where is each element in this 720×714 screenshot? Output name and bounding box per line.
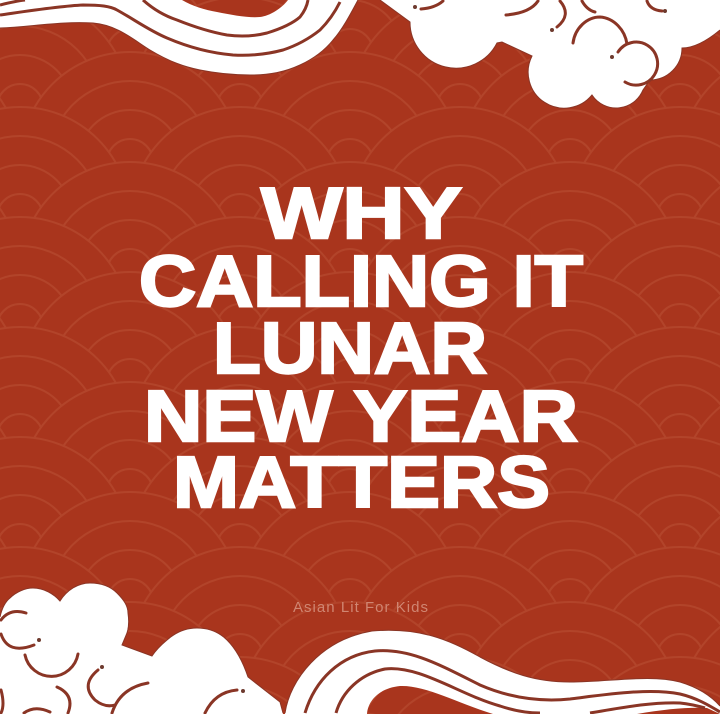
title: CALLING IT bbox=[139, 242, 583, 322]
bottom-right wave ribbons bbox=[285, 630, 720, 714]
title: LUNAR bbox=[213, 309, 487, 389]
title: WHY bbox=[261, 174, 462, 254]
credit text: Asian Lit For Kids bbox=[293, 599, 428, 616]
top-right cloud bbox=[380, 0, 720, 108]
title bbox=[139, 174, 583, 523]
bottom-left cloud bbox=[0, 583, 283, 714]
title: MATTERS bbox=[173, 443, 550, 523]
top-left wave ribbons bbox=[0, 0, 358, 75]
title: NEW YEAR bbox=[144, 377, 578, 457]
